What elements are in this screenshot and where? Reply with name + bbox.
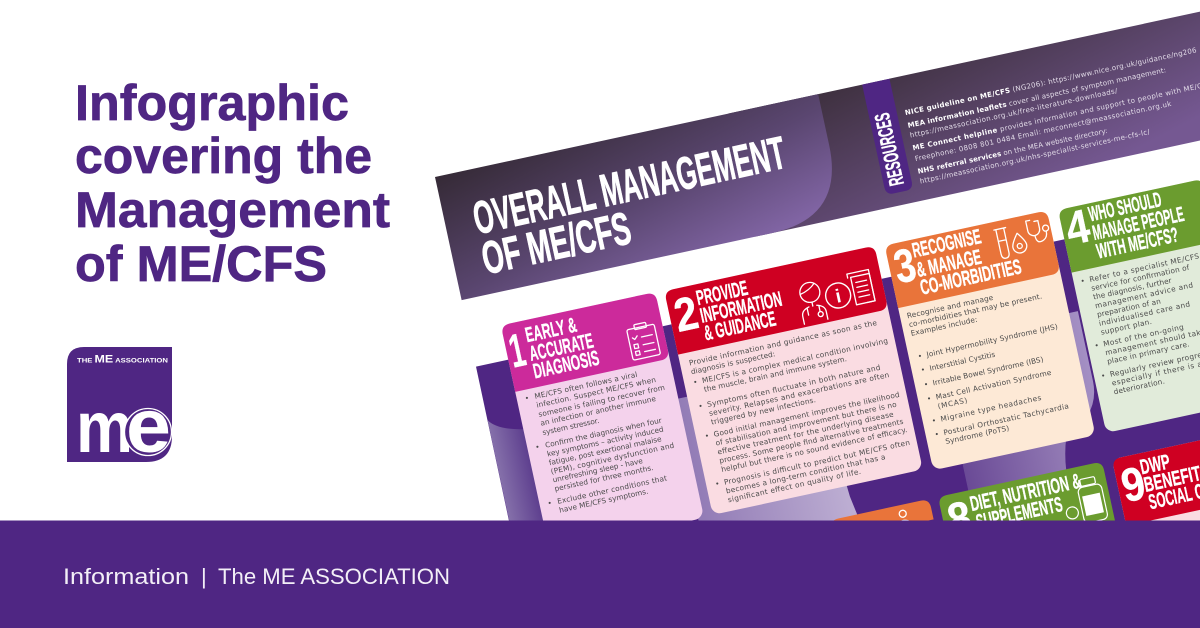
icon: stethoscope [1026, 217, 1051, 244]
logo: The ME Association: e [126, 384, 171, 469]
card 1: early and accurate diagnosis: ACCURATE [527, 330, 596, 366]
card 3 text: • [931, 416, 937, 425]
card 4 text: individualised care and [1098, 299, 1191, 328]
page title: OVERALL MANAGEMENT [468, 126, 790, 244]
card 3 text [906, 281, 1078, 448]
card 3: recognise and manage co-morbidities [884, 208, 1095, 470]
card 3 text: Syndrome (PoTS) [944, 423, 1010, 446]
card 2: provide information and guidance: INFORMATION [698, 288, 784, 328]
card 3 text: (MCAS) [937, 396, 968, 411]
card 2 text: diagnosis is suspected: [690, 349, 776, 376]
card 1: early and accurate diagnosis: 1 [504, 323, 530, 378]
card 1 text: system stressor. [541, 416, 600, 437]
page title: OF ME/CFS [477, 202, 635, 284]
card 9: DWP benefits and social care [1112, 428, 1200, 547]
card 1 text: • [547, 498, 553, 508]
card 2 text: severity. Relapses and exacerbations are often [708, 370, 890, 418]
resources text: Freephone: 0808 801 0484 Email: meconnect@meassociation.org.uk [914, 100, 1173, 163]
card 4 text: • [1094, 341, 1100, 350]
card 2 text: Symptoms often fluctuate in both nature and [706, 363, 881, 409]
card 2 text: • [697, 401, 704, 411]
card 2 text: of stabilisation and improvement but there is no [715, 400, 898, 448]
card 2 text: triggered by new infections. [710, 395, 817, 427]
resources text: NHS referral services on the MEA website directory: [917, 127, 1108, 176]
card 4 text: the diagnosis, further [1092, 276, 1172, 302]
card 2 text: helpful but there is no sound evidence of efficacy. [720, 425, 908, 474]
heading: infographic title: Management [75, 182, 390, 238]
heading: infographic title: Infographic [75, 75, 349, 131]
card 2: provide information and guidance: & GUIDANCE [702, 307, 778, 345]
card 3 text: Recognise and manage [906, 293, 994, 320]
card 2 text [688, 317, 915, 506]
card 8: diet, nutrition and supplements: 8 [943, 490, 976, 547]
card 4 text: Refer to a specialist ME/CFS [1088, 251, 1200, 284]
card 1 text: key symptoms – activity induced [546, 425, 664, 458]
resources text: https://meassociation.org.uk/nhs-specialist-services-me-cfs-lc/ [919, 128, 1151, 186]
card 8: diet, nutrition and supplements [938, 460, 1117, 566]
card 1 text: (PEM), cognitive dysfunction and [550, 441, 675, 476]
card 2 text: • [692, 377, 698, 387]
card 2: provide information and guidance: 2 [669, 285, 703, 342]
card 4 text: • [1100, 371, 1106, 381]
card 1: early and accurate diagnosis: DIAGNOSIS [531, 347, 601, 383]
resources text: NICE guideline on ME/CFS (NG206): https://www.nice.org.uk/guidance/ng206 [904, 46, 1198, 117]
card 1 text: ME/CFS often follows a viral [534, 370, 638, 401]
card 1 text: unrefreshing sleep - have [552, 456, 644, 484]
card 3: recognise and manage co-morbidities: RECOGNISE [910, 225, 983, 263]
heading: infographic title: covering the [75, 128, 372, 184]
card 3 text: • [920, 365, 926, 375]
card 1 text: infection. Suspect ME/CFS when [536, 375, 657, 410]
card 4 text: management advice and [1094, 280, 1194, 310]
resources text [904, 45, 1200, 186]
header band [435, 12, 1200, 300]
card 4 text: deterioration. [1113, 377, 1166, 396]
card 2 text: • [714, 479, 720, 489]
card 4 text: place in primary care. [1106, 339, 1190, 366]
footer bar: Information [63, 564, 189, 589]
card 2 text: the muscle, brain and immune system. [703, 354, 848, 394]
card 1 text: • [534, 442, 541, 452]
resources text: https://meassociation.org.uk/free-literature-downloads/ [909, 87, 1119, 140]
card 3: recognise and manage co-morbidities: & MANAGE [914, 246, 984, 282]
heading: infographic title [75, 75, 390, 292]
card 1 text: • [524, 393, 530, 403]
card 3 text: • [934, 429, 940, 439]
heading: infographic title: of ME/CFS [75, 236, 327, 292]
card 7: orange header, cropped [829, 499, 934, 541]
card 1: early and accurate diagnosis: EARLY & [523, 314, 579, 347]
icon: clipboard checklist [626, 321, 661, 360]
footer bar [0, 520, 1200, 628]
card 2 text: effective treatment for the underlying disease [717, 409, 895, 456]
card 2 text: Provide information and guidance as soon as the [688, 318, 878, 367]
card 1 text [524, 365, 686, 517]
icon: document [847, 270, 875, 305]
card 3: recognise and manage co-morbidities: CO-MORBIDITIES [918, 255, 1024, 300]
icon: doctor [796, 280, 828, 324]
card 3 text: Examples include: [910, 315, 978, 338]
card 3 text: • [923, 380, 929, 389]
resources tab [862, 79, 913, 195]
card 1 text: have ME/CFS symptoms. [558, 487, 649, 515]
icon: information circle [823, 281, 853, 310]
footer bar: | [201, 564, 207, 589]
card 4 text [1080, 251, 1200, 398]
card 4 text: Most of the on-going [1102, 322, 1184, 348]
logo: The ME Association: m [76, 388, 133, 468]
card 4 text: support plan. [1100, 317, 1153, 337]
card 3 text: co-morbidities that may be present. [908, 292, 1043, 329]
logo: The ME Association: THE ME ASSOCIATION [77, 354, 168, 366]
card 9: DWP benefits and social care: 9 [1116, 456, 1150, 512]
card 3 text: • [917, 351, 923, 361]
card 4 text: preparation of an [1096, 297, 1162, 319]
resources text: MEA information leaflets cover all aspects of symptom management: [907, 66, 1167, 130]
icon: test tube [994, 228, 1012, 259]
card 2 text: significant effect on quality of life. [727, 467, 862, 504]
card 3 text: Mast Cell Activation Syndrome [935, 368, 1053, 402]
card 1 text: fatigue, post exertional malaise [548, 434, 663, 467]
card 3 text: Interstitial Cystitis [929, 350, 996, 373]
card 1 text: someone is failing to recover from [538, 383, 666, 419]
card 2 text: becomes a long-term condition that has a [725, 452, 886, 496]
card 4: who should manage people with ME/CFS: 4 [1061, 199, 1094, 255]
icon: information circle: i [834, 286, 843, 308]
card 2 text: Prognosis is difficult to predict but ME/CFS often [723, 438, 911, 487]
card 3 text: Joint Hypermobility Syndrome (JHS) [925, 322, 1059, 359]
card 2: provide information and guidance: PROVIDE [694, 277, 750, 310]
card 3: recognise and manage co-morbidities: 3 [889, 237, 921, 293]
card 3 text: Postural Orthostatic Tachycardia [943, 401, 1070, 437]
card 1 text: persisted for three months. [554, 463, 654, 493]
card 1 text: an infection or another immune [539, 394, 657, 428]
card 1 text: Exclude other conditions that [556, 473, 668, 506]
card 1 text: Confirm the diagnosis when four [544, 416, 662, 450]
card 8: diet, nutrition and supplements: SUPPLEMENTS [974, 493, 1065, 534]
card 4 text: • [1080, 276, 1086, 286]
card 9: DWP benefits and social care: DWP [1138, 450, 1172, 479]
card 2 text: process. Some people find alternative treatments [718, 417, 904, 465]
card 3 text: • [926, 394, 932, 403]
card 2: provide information and guidance [664, 246, 923, 515]
card 2 text: ME/CFS is a complex medical condition involving [701, 336, 889, 385]
card 2 text: Good initial management improves the likelihood [713, 390, 900, 439]
icon: supplement bottle [1060, 475, 1108, 527]
icon: small target [894, 509, 909, 527]
card 4: who should manage people with ME/CFS [1057, 173, 1200, 433]
logo: The ME Association [67, 347, 172, 469]
card 1: early and accurate diagnosis [501, 292, 704, 551]
page title [468, 126, 799, 284]
card 3 text: Irritable Bowel Syndrome (IBS) [932, 355, 1044, 387]
resources tab: RESOURCES [871, 111, 909, 188]
card 4 text: service for confirmation of [1090, 263, 1190, 293]
icon: blood drop [1010, 232, 1028, 254]
card 8: diet, nutrition and supplements: DIET, NUTRITION & [968, 470, 1083, 516]
card 3 text: Migraine type headaches [940, 393, 1042, 424]
card 2 text: • [704, 431, 710, 441]
footer bar: The ME ASSOCIATION [218, 564, 450, 589]
purple background with lighter panels [476, 210, 1200, 568]
